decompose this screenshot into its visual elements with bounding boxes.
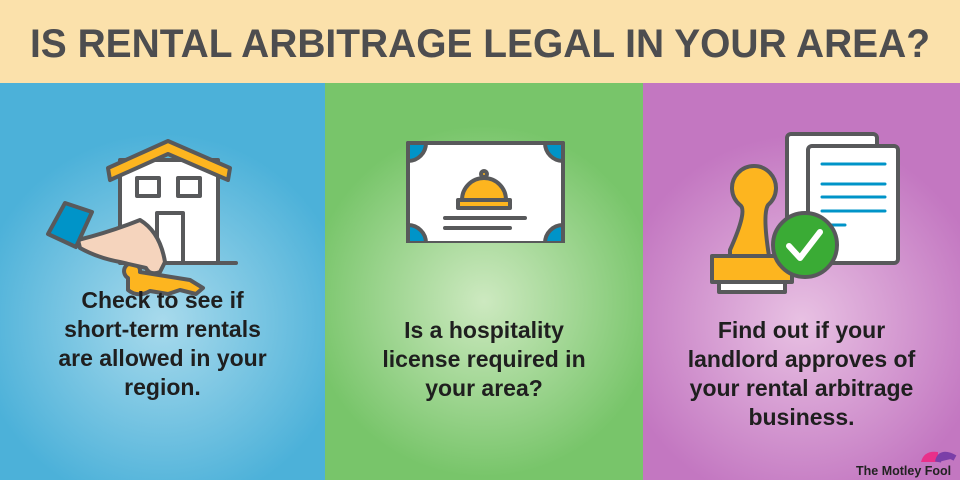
logo: The Motley Fool: The Motley Fool	[856, 464, 951, 478]
icon: certificate with bell	[406, 141, 565, 243]
text: panel 3: landlord approves of	[688, 346, 915, 372]
text: panel 2	[382, 317, 586, 401]
text: panel 2: your area?	[425, 375, 543, 401]
title: IS RENTAL ARBITRAGE LEGAL IN YOUR AREA?	[30, 22, 930, 66]
icon: stamp with documents and check	[710, 132, 900, 294]
text: panel 1: region.	[124, 374, 201, 400]
title	[0, 0, 960, 83]
text: panel 1	[58, 287, 267, 400]
text: panel 3: Find out if your	[718, 317, 885, 343]
text: panel 3: business.	[748, 404, 855, 430]
panel: short-term rentals	[0, 83, 325, 480]
panel: hospitality license	[325, 83, 643, 480]
text: panel 2: Is a hospitality	[404, 317, 564, 343]
text: panel 1: short-term rentals	[64, 316, 261, 342]
text: panel 3: your rental arbitrage	[690, 375, 913, 401]
logo: The Motley Fool	[856, 452, 956, 478]
text: panel 3	[688, 317, 916, 430]
text: panel 1: are allowed in your	[58, 345, 267, 371]
text: panel 2: license required in	[382, 346, 586, 372]
panel: landlord approval	[643, 83, 960, 480]
text: panel 1: Check to see if	[81, 287, 244, 313]
icon: house with hand and key	[46, 139, 238, 296]
